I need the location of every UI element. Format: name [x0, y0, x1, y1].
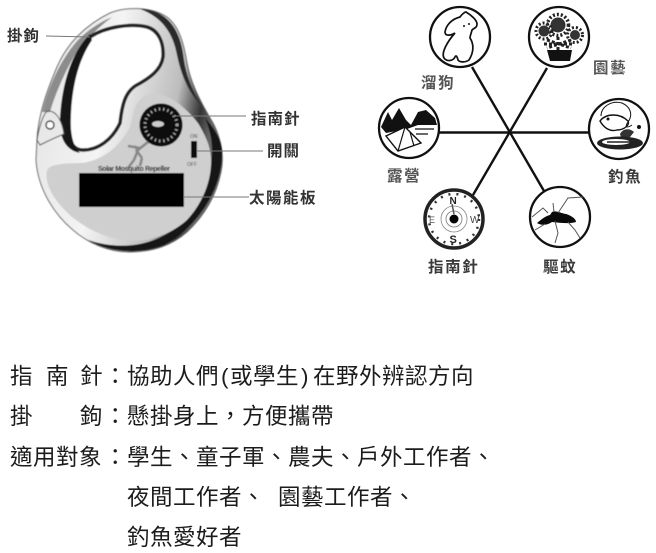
device: solar mosquito repeller carabiner — [36, 9, 222, 252]
icon: fishing — [589, 99, 649, 159]
description: hook: ： — [104, 404, 127, 429]
activity label: camping: 露營 — [387, 167, 421, 185]
description: target users: 學生、童子軍、農夫、戶外工作者、 — [127, 445, 495, 470]
description: compass — [10, 364, 474, 389]
description: hook: 掛 — [10, 404, 33, 429]
description: compass: ( — [221, 364, 229, 389]
part label: solar panel: 太陽能板 — [249, 189, 317, 207]
device: solar mosquito repeller carabiner: OFF — [187, 162, 197, 168]
description: hook — [10, 404, 334, 429]
icon: camping tent — [379, 98, 439, 158]
switch — [191, 141, 197, 158]
icon: compass — [425, 190, 483, 248]
activity label: fishing: 釣魚 — [608, 167, 642, 186]
hook dark left band — [60, 34, 92, 153]
part label: hook: 掛鉤 — [7, 26, 40, 45]
description: compass: 指 — [10, 364, 33, 389]
description: compass: ) — [301, 364, 309, 389]
description: target users: ： — [104, 445, 127, 470]
description: target users: 園藝工作者、 — [278, 485, 416, 510]
icon: compass: E — [429, 215, 435, 225]
description: compass: 針 — [80, 364, 103, 389]
device body — [36, 9, 222, 252]
part label: compass: 指南針 — [251, 109, 301, 128]
activity label: compass: 指南針 — [428, 257, 479, 276]
icon: compass: S — [450, 234, 457, 246]
icon: flower basket — [529, 7, 589, 67]
icon: mosquito — [530, 187, 590, 247]
activity label: mosquito repelling: 驅蚊 — [543, 257, 577, 276]
hub: six spokes — [439, 67, 589, 195]
upper left shaded band — [42, 17, 112, 112]
solar panel — [79, 173, 184, 207]
gray face panel — [47, 94, 211, 241]
ON OFF marks: ON — [190, 134, 198, 140]
description: target users: 夜間工作者、 — [127, 485, 265, 510]
description: compass: 南 — [46, 364, 69, 389]
product name: Solar Mosquito Repeller — [98, 166, 170, 173]
description: compass: ： — [104, 364, 127, 389]
compass dial — [140, 104, 182, 146]
description: hook: 鉤 — [80, 404, 103, 429]
icon: dog walking — [430, 7, 490, 67]
leader lines — [46, 36, 263, 197]
icon: compass: W — [470, 215, 480, 226]
icon: compass: N — [450, 196, 457, 207]
activity label: dog walking: 溜狗 — [421, 74, 455, 92]
description: target users: 適用對象 — [10, 445, 102, 470]
hinge and pin — [37, 111, 64, 145]
carabiner hole with dark border — [68, 25, 163, 150]
description: compass: 在野外辨認方向 — [313, 364, 474, 389]
activity label: gardening: 園藝 — [593, 59, 627, 77]
upper right dark rim — [140, 9, 201, 105]
description: compass: 或學生 — [230, 364, 299, 389]
description: target users: 釣魚愛好者 — [127, 525, 242, 550]
part label: switch: 開關 — [267, 142, 300, 160]
lower dark rim — [88, 118, 222, 251]
description: target users — [10, 445, 495, 550]
description: hook: 懸掛身上，方便攜帶 — [127, 404, 334, 429]
logo sketch — [128, 142, 148, 168]
description: compass: 協助人們 — [127, 364, 219, 389]
